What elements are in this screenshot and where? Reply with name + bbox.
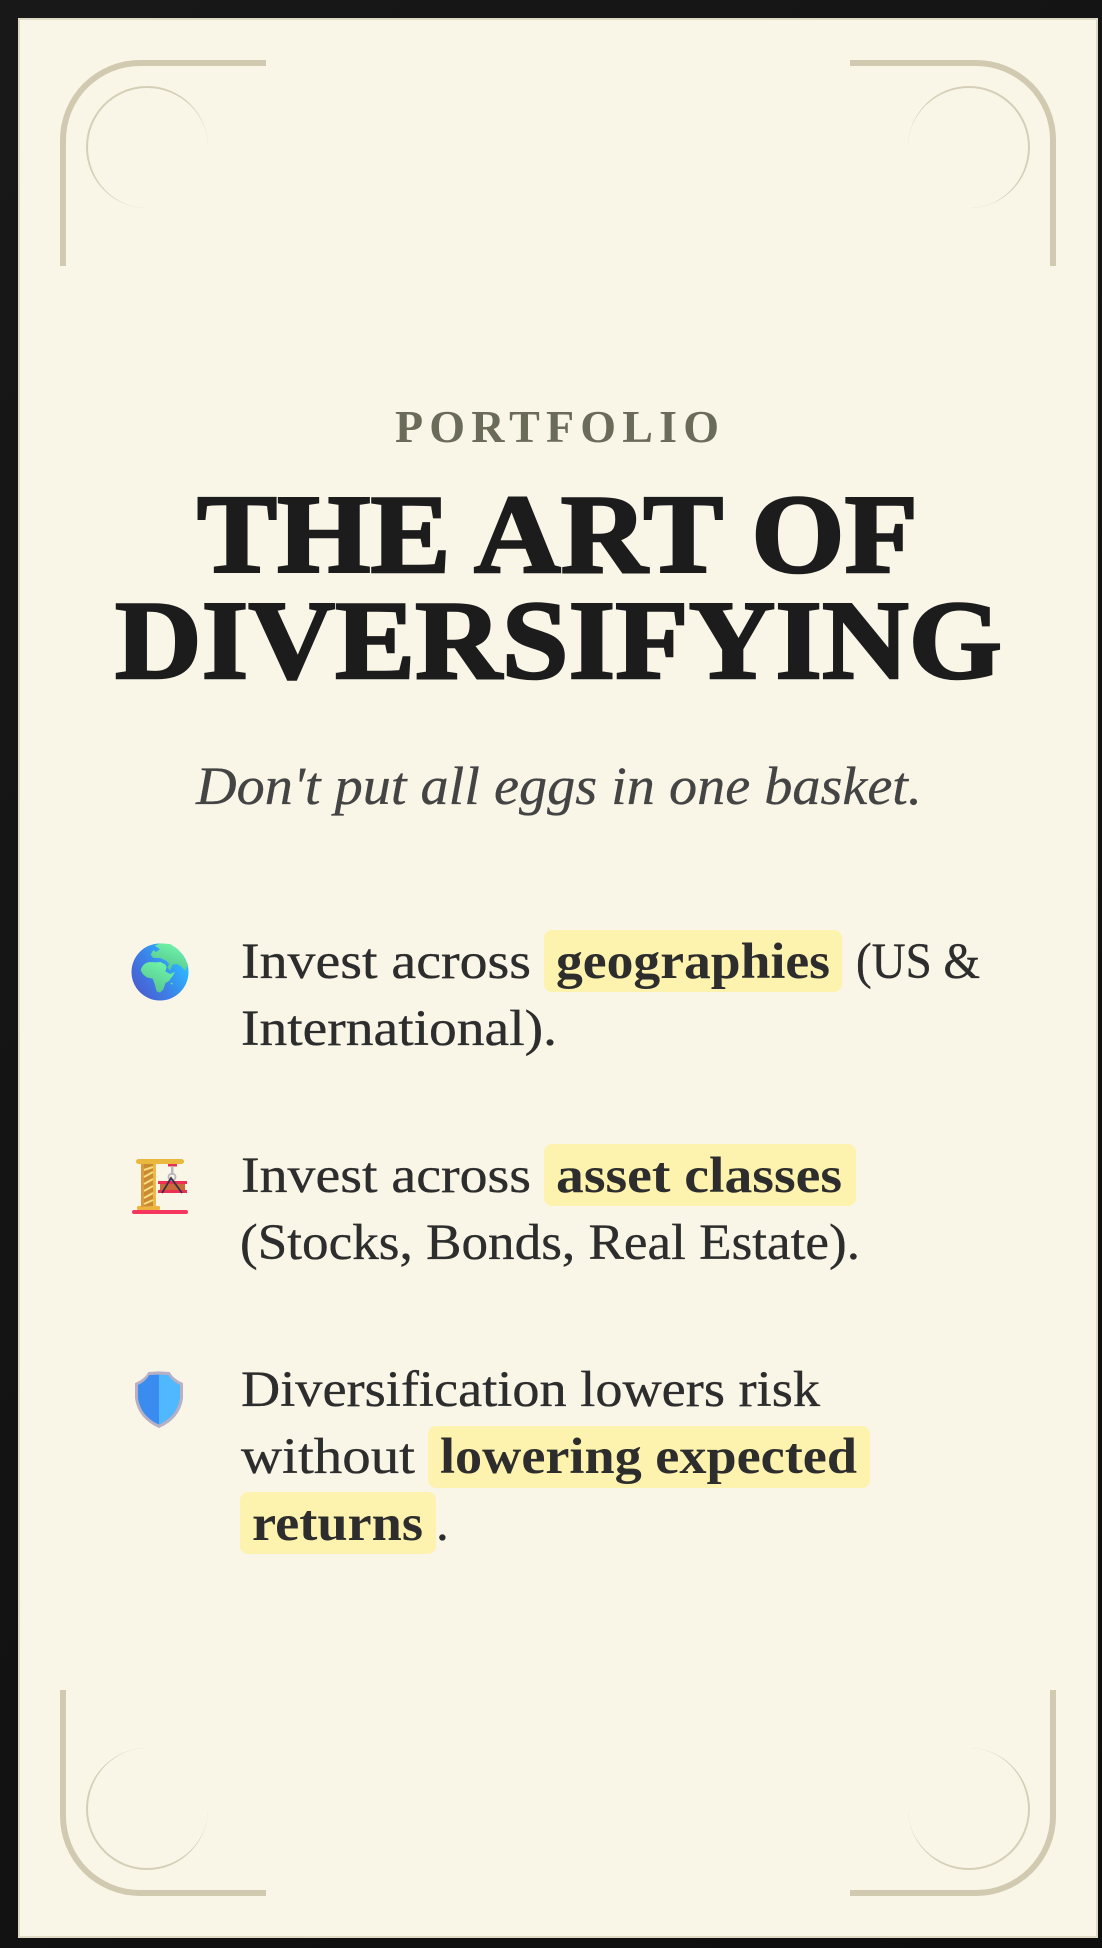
text: item 2: (Stocks, Bonds, Real Estate).	[240, 1215, 860, 1271]
text: item 3: returns	[252, 1496, 423, 1552]
highlight: lowering expected	[428, 1426, 870, 1488]
text: item 3: lowering expected	[440, 1429, 857, 1485]
text: item 2	[240, 1148, 860, 1271]
corner ornament: bottom left	[60, 1690, 266, 1896]
title: THE ART OF	[197, 473, 918, 597]
subtitle: Don't put all eggs in one basket.	[195, 756, 922, 816]
text: item 1: Invest across	[241, 934, 531, 990]
icon: construction crane	[132, 1159, 188, 1214]
text: item 3	[241, 1362, 857, 1552]
text: item 1: geographies	[556, 934, 830, 990]
text: item 2: Invest across	[241, 1148, 531, 1204]
corner ornament: top right	[850, 60, 1056, 266]
icon: globe	[132, 943, 188, 1000]
text: item 1: International).	[241, 1001, 557, 1057]
highlight: asset classes	[544, 1144, 856, 1206]
list item: geographies	[132, 930, 980, 1057]
icon: shield	[135, 1372, 183, 1428]
highlight: returns	[240, 1492, 436, 1554]
highlight: geographies	[544, 930, 842, 992]
text: item 3: .	[436, 1496, 449, 1552]
list item: lowers risk	[135, 1362, 870, 1554]
text: item 2: asset classes	[556, 1148, 842, 1204]
text: item 1	[241, 934, 980, 1057]
text: item 1: (US &	[856, 934, 980, 990]
title	[115, 473, 1002, 703]
list item: asset classes	[132, 1144, 860, 1271]
text: item 3: Diversification lowers risk	[241, 1362, 821, 1418]
title: DIVERSIFYING	[115, 579, 1002, 703]
eyebrow: PORTFOLIO: PORTFOLIO	[395, 401, 719, 452]
corner ornament: top left	[60, 60, 266, 266]
corner ornament: bottom right	[850, 1690, 1056, 1896]
text: item 3: without	[241, 1429, 415, 1485]
